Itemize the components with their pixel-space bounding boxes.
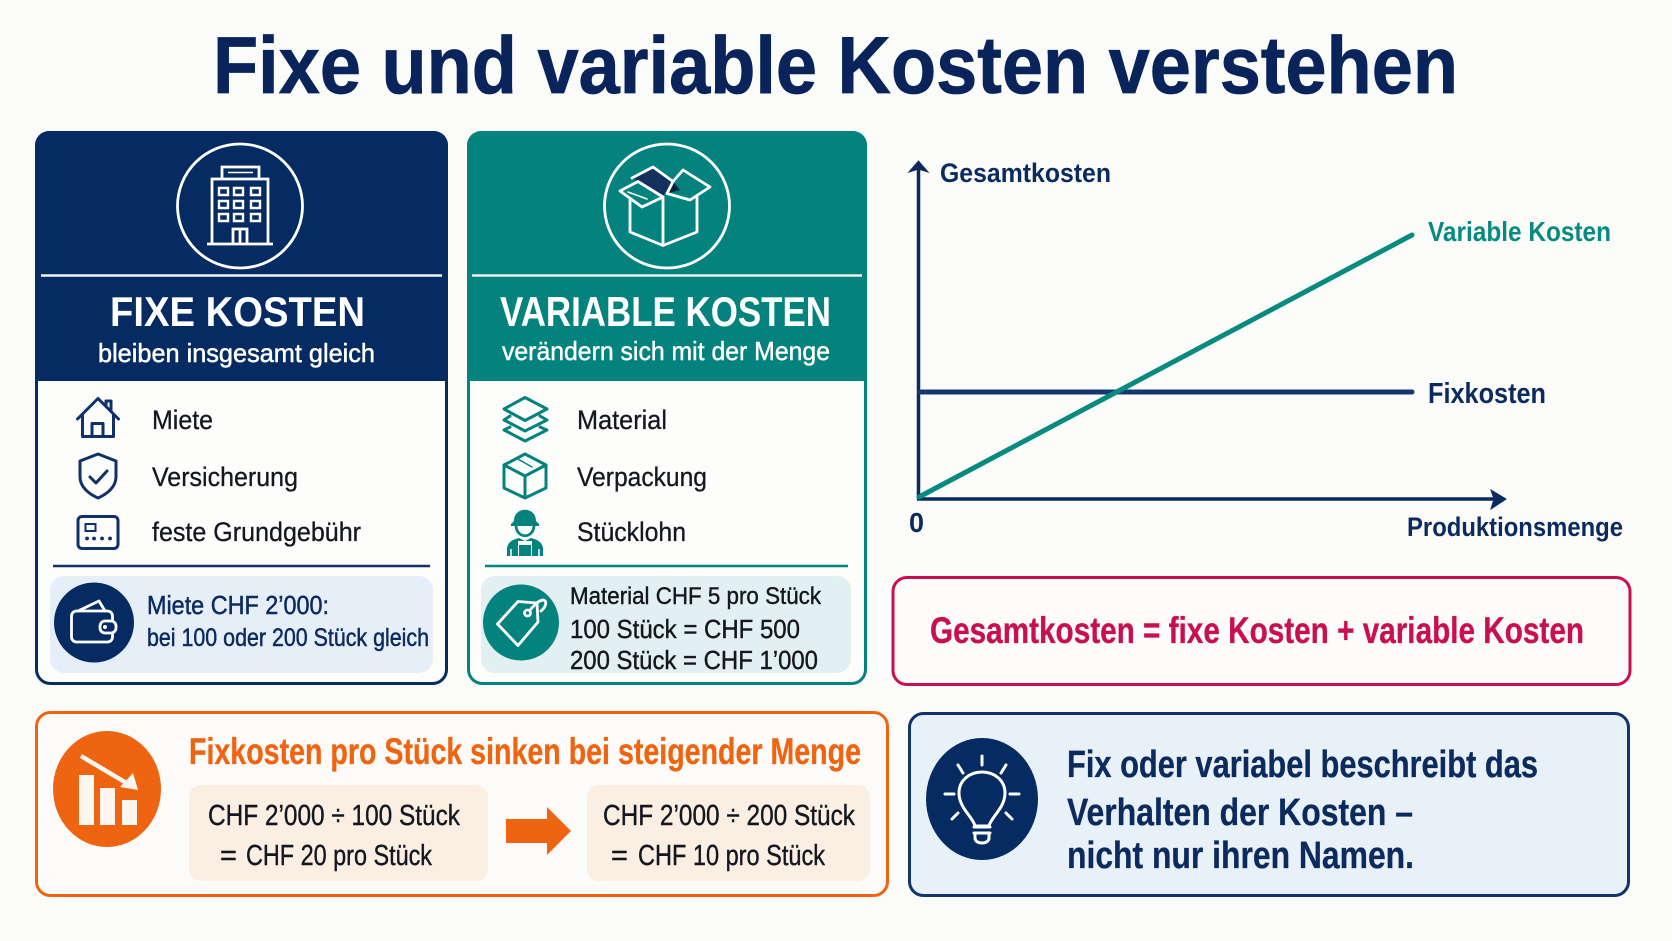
line: Variable Kosten [919, 235, 1412, 497]
chart: cost lines [909, 158, 1623, 542]
callout text line 2: bei 100 oder 200 Stück gleich [147, 624, 429, 652]
heading: VARIABLE KOSTEN: VARIABLE KOSTEN [500, 288, 831, 335]
message text [1067, 744, 1538, 877]
panel: variable Kosten [467, 131, 867, 684]
title: Fixe und variable Kosten verstehen [213, 21, 1458, 111]
axis label: Gesamtkosten: Gesamtkosten [940, 158, 1111, 188]
item: feste Grundgebühr: feste Grundgebühr [152, 517, 361, 547]
calculation line 2: = [611, 840, 628, 872]
icon: price tag [483, 584, 559, 660]
callout: Material example [481, 576, 851, 675]
x axis [917, 490, 1506, 509]
icon: wallet [54, 582, 134, 662]
callout: Miete example [50, 576, 433, 673]
callout text line 2: 100 Stück = CHF 500 [570, 614, 800, 644]
message text: Verhalten der Kosten – [1067, 792, 1413, 834]
item: Verpackung: Verpackung [577, 462, 707, 492]
axis label: Produktionsmenge: Produktionsmenge [1407, 512, 1623, 542]
icon: falling bars [53, 731, 161, 847]
icon: cube [504, 454, 546, 498]
icon: house [78, 398, 118, 436]
message text: nicht nur ihren Namen. [1067, 835, 1414, 877]
panel: formula [893, 578, 1630, 684]
icon: shield [80, 454, 116, 498]
calculation line 2: CHF 10 pro Stück [638, 840, 825, 872]
line label: Variable Kosten: Variable Kosten [1428, 216, 1611, 247]
icon: fee card [78, 516, 118, 548]
arrow [506, 807, 571, 855]
icon: layers [504, 398, 547, 441]
panel: fixe Kosten [35, 131, 448, 684]
icon: open box [604, 144, 730, 268]
line: Fixkosten [920, 390, 1412, 394]
heading: Fixkosten pro Stück sinken bei steigender Menge [189, 731, 861, 772]
heading: FIXE KOSTEN: FIXE KOSTEN [110, 288, 365, 335]
subheading: verändern sich mit der Menge [502, 336, 830, 366]
item: Stücklohn: Stücklohn [577, 517, 686, 547]
calculation line 2: = [220, 840, 237, 872]
calculation: 200 Stück [587, 785, 870, 881]
calculation line 2: CHF 20 pro Stück [246, 840, 432, 872]
item: Miete: Miete [152, 405, 213, 435]
calculation: 100 Stück [189, 785, 488, 881]
callout text line 3: 200 Stück = CHF 1’000 [570, 645, 818, 675]
panel: key message [910, 714, 1628, 896]
calculation line 1: CHF 2’000 ÷ 200 Stück [603, 800, 855, 832]
message text: Fix oder variabel beschreibt das [1067, 744, 1538, 786]
icon: building [178, 144, 302, 268]
line label: Fixkosten: Fixkosten [1428, 378, 1546, 410]
panel: Fixkosten pro Stück [36, 712, 888, 896]
callout text: Material CHF 5 pro Stück [570, 583, 822, 610]
item: Material: Material [577, 405, 667, 435]
item: Versicherung: Versicherung [152, 462, 298, 492]
axis origin: 0 [909, 507, 924, 538]
calculation line 1: CHF 2’000 ÷ 100 Stück [208, 800, 460, 832]
icon: light bulb [926, 738, 1038, 860]
subheading: bleiben insgesamt gleich [98, 338, 375, 368]
icon: worker [507, 510, 543, 556]
callout text: Miete CHF 2’000: [147, 590, 329, 620]
y axis [909, 161, 928, 499]
